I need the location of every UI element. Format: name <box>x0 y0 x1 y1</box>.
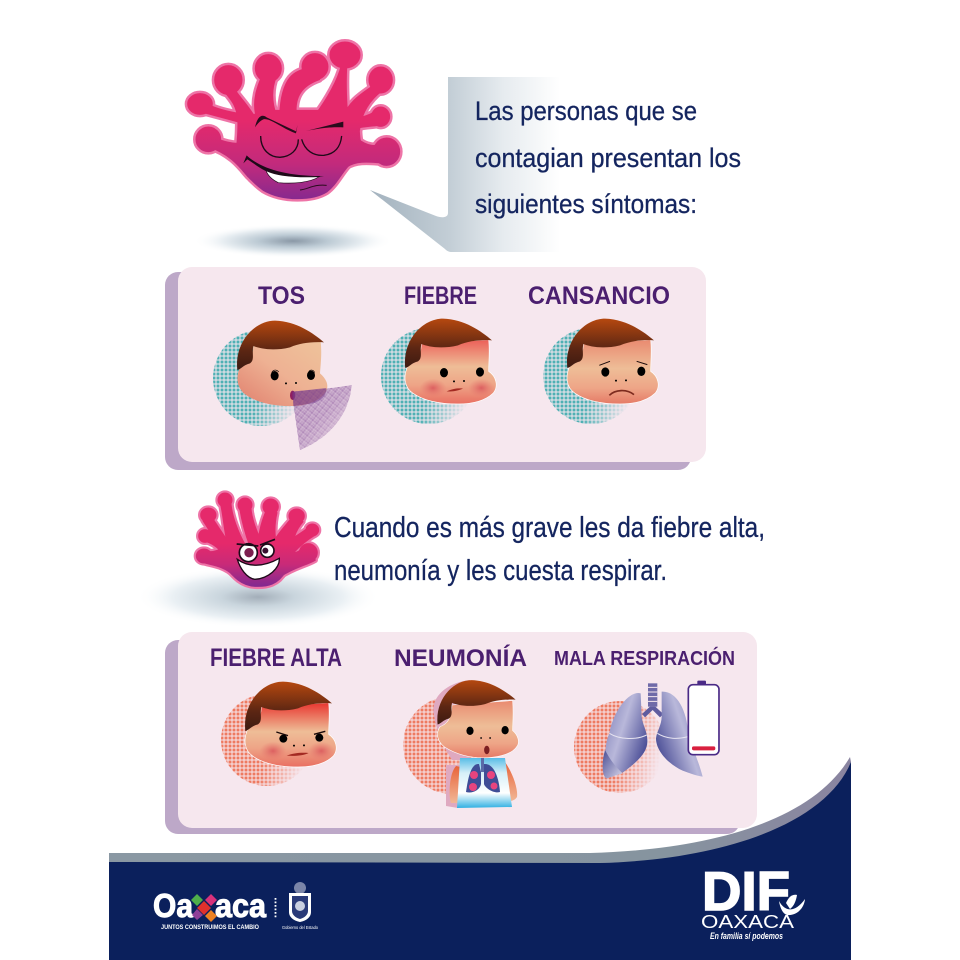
intro text: contagian presentan los <box>475 143 741 173</box>
icon: tired child <box>543 319 658 424</box>
logo: DIF Oaxaca: En familia sí podemos <box>710 931 783 942</box>
logo: Oaxaca: JUNTOS CONSTRUIMOS EL CAMBIO <box>161 924 259 931</box>
icon: grinning virus character <box>197 493 318 586</box>
icon: child with high fever <box>221 682 336 786</box>
intro text: Las personas que se <box>475 96 697 126</box>
panel: severe symptoms: MALA RESPIRACIÓN <box>554 646 735 670</box>
logo: Oaxaca <box>153 887 267 931</box>
icon: lungs and low battery <box>574 681 719 793</box>
panel: common symptoms: CANSANCIO <box>528 282 670 310</box>
intro text <box>475 96 741 219</box>
panel: severe symptoms: FIEBRE ALTA <box>210 644 342 672</box>
logo: Oaxaca: Oa <box>153 887 194 924</box>
icon: angry virus character <box>188 42 399 198</box>
virus shadow small <box>136 566 380 628</box>
speech bubble <box>370 77 560 252</box>
icon: child with fever <box>381 319 496 424</box>
logo: state shield <box>282 882 318 930</box>
logo divider dots <box>274 898 276 919</box>
logo: state shield: Gobierno del Estado <box>282 925 318 930</box>
panel: common symptoms <box>165 267 706 470</box>
logo: DIF Oaxaca <box>701 860 805 942</box>
logo: DIF Oaxaca: OAXACA <box>701 912 794 932</box>
icon: coughing child <box>213 321 352 450</box>
intro text: siguientes síntomas: <box>475 189 697 219</box>
icon: child with pneumonia <box>403 680 518 808</box>
lungs in chest <box>466 758 500 793</box>
logo: Oaxaca: aca <box>215 887 267 924</box>
panel: common symptoms: TOS <box>258 282 305 310</box>
virus shadow <box>193 224 393 258</box>
shirt and arms <box>450 758 517 808</box>
severity text: neumonía y les cuesta respirar. <box>334 555 667 587</box>
panel: common symptoms: FIEBRE <box>404 282 477 310</box>
severity text <box>334 512 765 587</box>
footer band <box>109 757 851 960</box>
logo: DIF Oaxaca: DIF <box>702 860 790 922</box>
severity text: Cuando es más grave les da fiebre alta, <box>334 512 765 544</box>
panel: severe symptoms <box>165 632 757 834</box>
panel: severe symptoms: NEUMONÍA <box>394 644 527 672</box>
